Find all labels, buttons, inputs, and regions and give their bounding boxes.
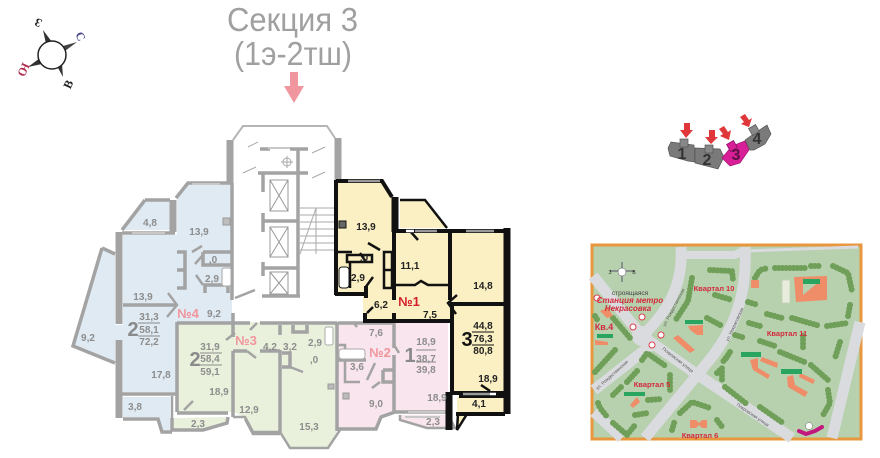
icon: compass xyxy=(14,15,89,91)
map labels: Квартал 10 xyxy=(694,284,734,293)
map labels: Некрасовка xyxy=(605,304,652,313)
icon: compass: С xyxy=(72,29,89,43)
labels: apartment 4: 31,3 xyxy=(139,312,159,323)
map labels: Станция метро xyxy=(597,296,663,305)
building core walls xyxy=(230,126,338,297)
apartment 3 fill xyxy=(172,322,337,448)
arrow: section pointer xyxy=(284,72,304,103)
roads xyxy=(593,247,860,438)
metro markers xyxy=(594,295,664,348)
labels: apartment 2: №2 xyxy=(369,345,391,360)
map labels: ул. Рождественская xyxy=(662,287,686,327)
labels: apartment 2: 18,9 xyxy=(427,393,447,404)
labels: apartment 1: №1 xyxy=(398,294,420,309)
map labels: Покровская улица xyxy=(736,402,770,428)
labels: apartment 1: 76,3 xyxy=(473,334,493,345)
target building marker xyxy=(799,422,822,434)
labels: apartment 1: 18,9 xyxy=(478,374,498,385)
labels: apartment 2 xyxy=(350,328,447,428)
labels: apartment 4 xyxy=(81,218,221,413)
section 4: 4 xyxy=(753,131,762,148)
labels: apartment 4: 9,2 xyxy=(81,333,95,344)
labels: apartment 3: 15,3 xyxy=(299,422,319,433)
apartment 2 walls xyxy=(338,322,455,429)
map labels: Покровская улица xyxy=(661,346,695,374)
labels: apartment 3: 12,9 xyxy=(239,405,259,416)
labels: apartment 3: ,0 xyxy=(310,355,319,366)
map labels: ул. Рождественская xyxy=(595,359,630,391)
title: section heading: Секция 3 xyxy=(227,1,358,38)
labels: apartment 3: №3 xyxy=(235,333,257,348)
map labels: строящаяся xyxy=(612,290,649,297)
labels: apartment 1: ,0 xyxy=(360,253,369,264)
labels: apartment 3: 2,9 xyxy=(308,338,322,349)
labels: apartment 2: 9,0 xyxy=(369,399,383,410)
site key: building sections xyxy=(668,114,771,169)
map base xyxy=(592,245,861,439)
labels: apartment 4: 2,9 xyxy=(205,274,219,285)
labels: apartment 1: 80,8 xyxy=(473,346,493,357)
map labels: Квартал 5 xyxy=(634,380,670,389)
map compass xyxy=(608,262,636,282)
icon: compass: В xyxy=(60,78,76,91)
kindergarten tags xyxy=(597,279,820,396)
labels: apartment 2: 39,8 xyxy=(416,365,436,376)
arrows: section pointers xyxy=(680,114,752,144)
section 2: 2 xyxy=(703,152,712,169)
labels: apartment 2: 7,6 xyxy=(369,328,383,339)
labels: apartment 3: 2 xyxy=(189,349,201,371)
labels: apartment 3: 4,2 xyxy=(263,342,277,353)
labels: apartment 1: 2,9 xyxy=(351,273,365,284)
apartment 3 walls xyxy=(172,313,340,448)
labels: apartment 1: 11,1 xyxy=(401,261,420,272)
icon: compass: Ю xyxy=(14,61,33,79)
labels: apartment 1: 14,8 xyxy=(473,281,493,292)
labels: apartment 4: 58,1 xyxy=(139,325,159,336)
map labels: Квартал 6 xyxy=(682,431,718,440)
labels: apartment 3: 18,9 xyxy=(209,387,229,398)
labels: apartment 4: 4,8 xyxy=(143,218,157,229)
buildings xyxy=(595,276,827,428)
icon: compass: З xyxy=(32,15,44,30)
title: section heading: (1э-2тш) xyxy=(234,35,352,72)
labels: apartment 2: 38,7 xyxy=(416,354,436,365)
map labels xyxy=(595,284,807,440)
section 3: 3 xyxy=(732,147,741,164)
labels: apartment 2: 3,6 xyxy=(350,362,364,373)
labels: apartment 4: 9,2 xyxy=(207,309,221,320)
title: section heading xyxy=(227,1,358,72)
labels: apartment 4: 2 xyxy=(127,319,139,341)
labels: apartment 3 xyxy=(189,333,322,433)
labels: apartment 2: 2,3 xyxy=(426,417,440,428)
map labels: ул. Некрасовская xyxy=(725,306,745,342)
labels: apartment 1: 6,2 xyxy=(374,300,388,311)
labels: apartment 4: ,0 xyxy=(209,255,218,266)
section 1: 1 xyxy=(678,146,687,163)
labels: apartment 4: 17,8 xyxy=(151,370,171,381)
labels: apartment 4: 13,9 xyxy=(133,292,153,303)
map compass: З xyxy=(608,270,612,276)
apartment 4 walls xyxy=(73,183,255,432)
apartment 4 fill xyxy=(73,183,232,430)
location map xyxy=(592,245,861,440)
labels: apartment 1: 7,5 xyxy=(423,310,437,321)
labels: apartment 3: 59,1 xyxy=(200,367,220,378)
trees xyxy=(595,266,852,435)
map labels: Кв.4 xyxy=(595,322,613,332)
apartment 2 fill xyxy=(338,322,455,430)
labels: apartment 4: 72,2 xyxy=(139,337,159,348)
labels: apartment 1: 4,1 xyxy=(472,399,486,410)
labels: apartment 2: 1 xyxy=(404,345,416,367)
labels: apartment 2: 18,9 xyxy=(416,337,436,348)
labels: apartment 4: 13,9 xyxy=(189,227,209,238)
labels: apartment 3: 31,9 xyxy=(200,342,220,353)
labels: apartment 1 xyxy=(351,222,498,410)
labels: apartment 3: 2,3 xyxy=(191,419,205,430)
labels: apartment 3: 3,2 xyxy=(283,342,297,353)
labels: apartment 3: 58,4 xyxy=(200,354,220,365)
labels: apartment 1: 3 xyxy=(461,329,473,351)
apartment 1 fill xyxy=(337,183,504,428)
apartment 1 walls xyxy=(335,180,510,430)
labels: apartment 1: 44,8 xyxy=(473,321,493,332)
labels: apartment 1: 13,9 xyxy=(356,222,376,233)
labels: apartment 4: №4 xyxy=(177,306,200,321)
map compass: В xyxy=(632,270,636,276)
labels: apartment 4: 3,8 xyxy=(128,402,142,413)
floor plan xyxy=(73,126,510,448)
map labels: Квартал 11 xyxy=(767,329,807,338)
